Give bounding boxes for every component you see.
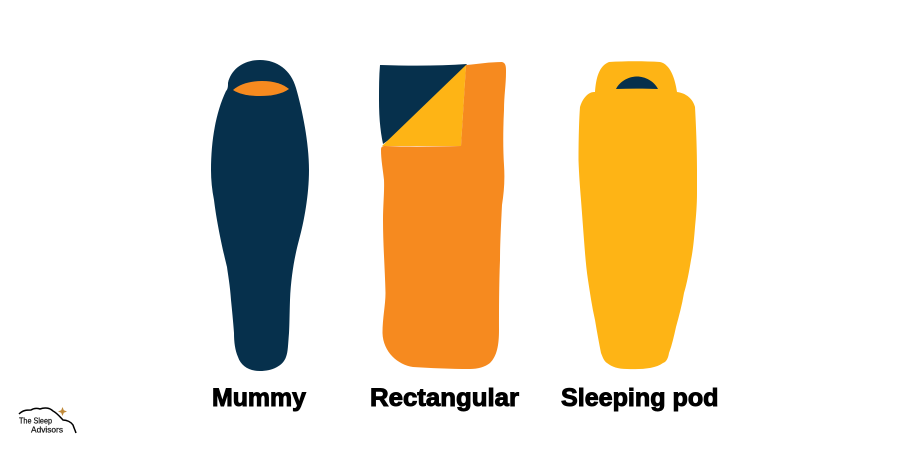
icon: sleeping pod bbox=[578, 61, 697, 369]
icon: rectangular sleeping bag bbox=[379, 62, 506, 369]
pod opening bbox=[616, 76, 658, 89]
logo wordmark line two: Advisors bbox=[31, 426, 63, 434]
label: Rectangular: Rectangular bbox=[370, 384, 519, 412]
inner lining bbox=[379, 64, 467, 144]
folded flap bbox=[382, 65, 466, 146]
icon: mummy sleeping bag bbox=[211, 60, 309, 371]
logo sparkle bbox=[58, 407, 67, 416]
logo: The Sleep Advisors bbox=[19, 407, 76, 434]
bag body bbox=[381, 62, 506, 369]
logo cloud outline bbox=[19, 408, 76, 433]
logo wordmark line one: The Sleep bbox=[19, 416, 52, 426]
label: Sleeping pod: Sleeping pod bbox=[561, 384, 718, 412]
label: Mummy: Mummy bbox=[212, 384, 306, 412]
hood opening bbox=[233, 81, 289, 96]
